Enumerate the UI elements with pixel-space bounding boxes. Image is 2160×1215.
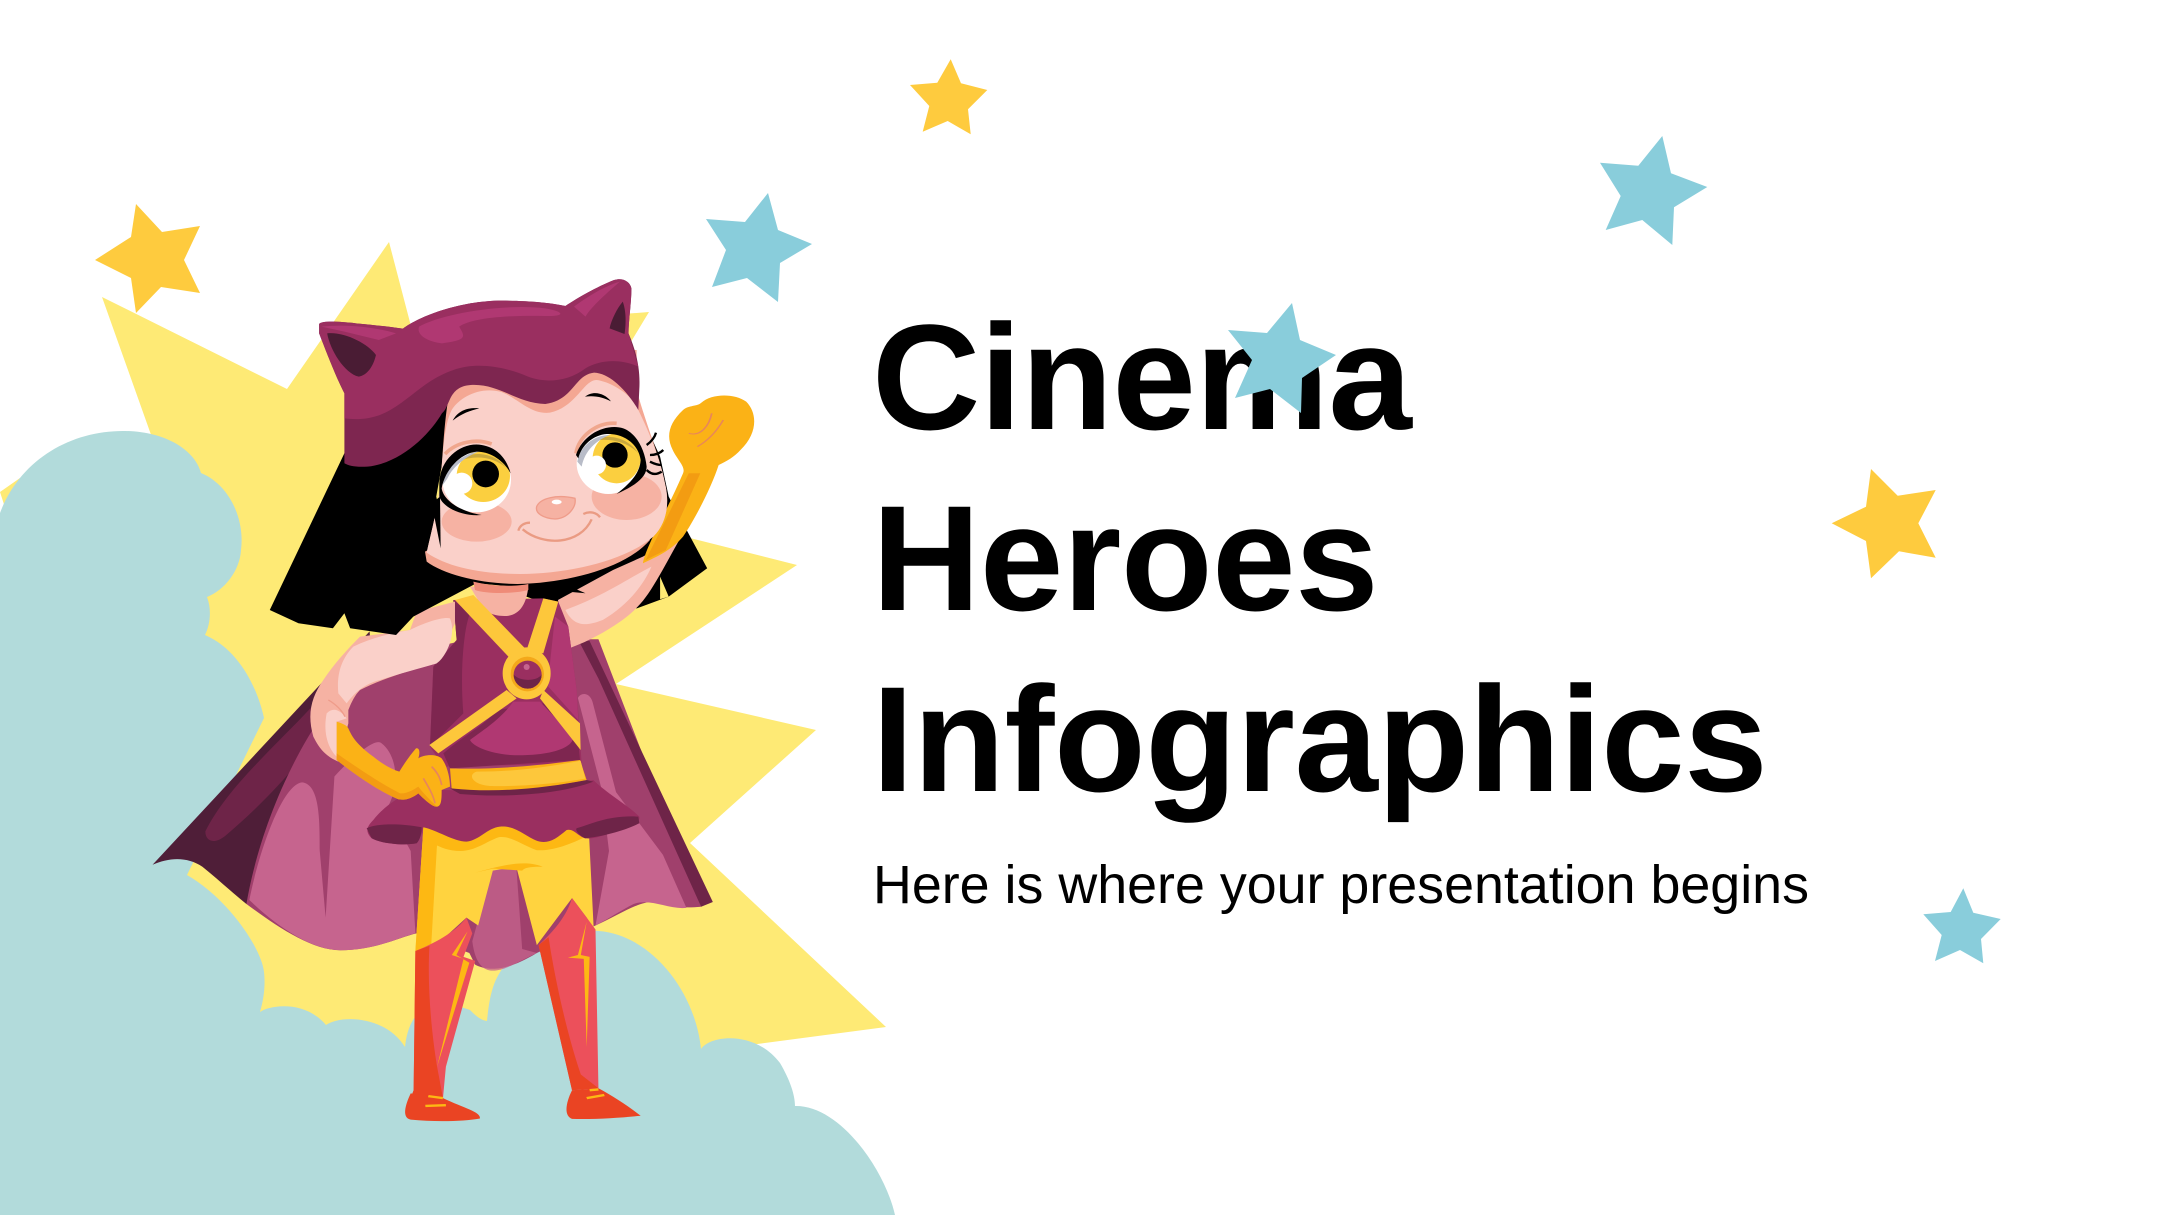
chin shadow bbox=[425, 520, 650, 584]
left boot bbox=[411, 918, 475, 1098]
star: yellow left bbox=[95, 204, 200, 313]
title: Infographics bbox=[872, 655, 1767, 823]
hair front bbox=[270, 400, 585, 635]
neck and chest skin bbox=[470, 587, 528, 616]
star: yellow top bbox=[910, 59, 987, 134]
cloud bbox=[0, 431, 895, 1215]
subtitle: Here is where your presentation begins bbox=[873, 855, 1809, 915]
hair back right bbox=[517, 407, 707, 613]
left eye bbox=[439, 441, 511, 515]
yellow starburst bbox=[0, 242, 886, 1100]
glove: hand on hip bbox=[337, 722, 450, 807]
torso and left arm bbox=[310, 587, 640, 844]
superhero girl illustration bbox=[153, 279, 754, 1121]
star: blue left bbox=[706, 193, 812, 302]
hair strand bbox=[432, 497, 441, 548]
head bbox=[425, 350, 667, 593]
title: Heroes bbox=[872, 474, 1378, 642]
star: yellow right bbox=[1832, 469, 1936, 578]
star: blue over title bbox=[1228, 303, 1336, 413]
hat bbox=[319, 279, 723, 560]
star: blue bottom right bbox=[1923, 888, 2001, 963]
right eye bbox=[576, 423, 663, 494]
skirt bbox=[367, 780, 640, 844]
legs and boots bbox=[405, 824, 641, 1121]
medallion bbox=[503, 647, 551, 699]
right boot bbox=[539, 898, 598, 1090]
title bbox=[872, 293, 1767, 823]
title: Cinema bbox=[872, 293, 1413, 461]
belt bbox=[450, 780, 593, 796]
mouth bbox=[523, 519, 592, 541]
glove: raised fist bbox=[643, 396, 754, 563]
nose bbox=[536, 497, 575, 519]
hat band edge bbox=[427, 350, 667, 553]
eyebrows bbox=[453, 393, 611, 421]
left arm bbox=[310, 602, 455, 762]
raised arm bbox=[558, 396, 754, 648]
star: blue top right bbox=[1600, 136, 1707, 245]
face bbox=[427, 380, 667, 574]
cape bbox=[153, 631, 713, 971]
neck shadow bbox=[473, 582, 528, 593]
blush bbox=[442, 502, 512, 542]
chest straps bbox=[455, 595, 527, 658]
